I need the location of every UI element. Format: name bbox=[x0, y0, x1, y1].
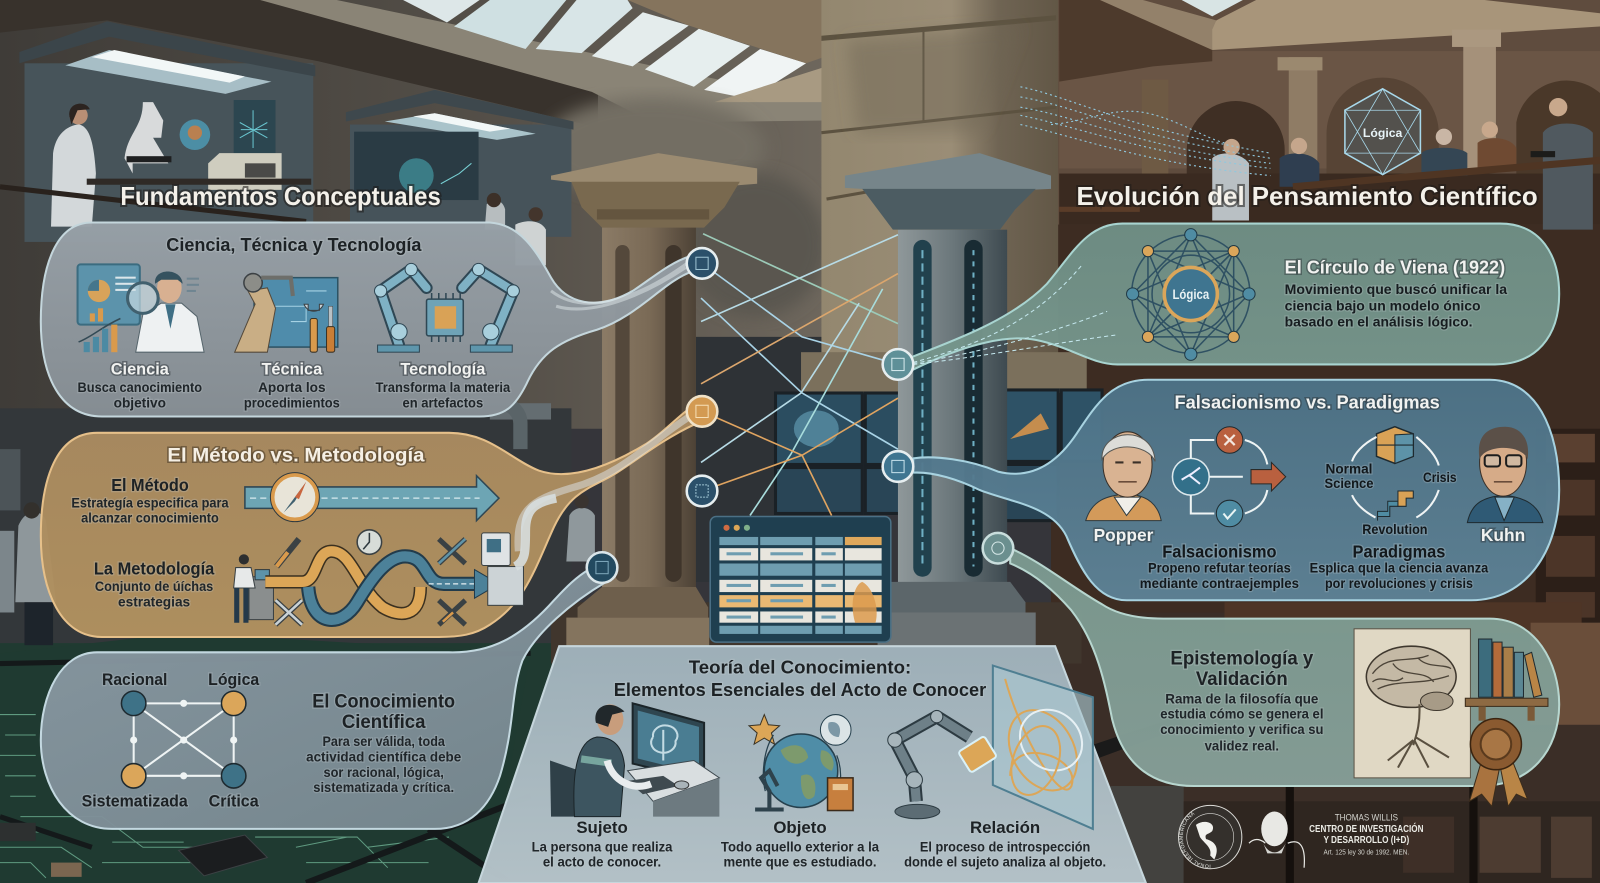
panel: Falsacionismo vs. Paradigmas bbox=[913, 380, 1559, 600]
portrait: Popper: Popper bbox=[1094, 525, 1154, 545]
connector lines bbox=[701, 234, 898, 516]
text: La Metodología: estrategias bbox=[118, 594, 191, 609]
glass case 2 bbox=[346, 90, 573, 265]
cycle: normal science, crisis, revolution: Normal bbox=[1326, 462, 1372, 477]
monitors wall bbox=[776, 390, 1102, 521]
credit text bbox=[1309, 813, 1423, 856]
text: Paradigmas bbox=[1310, 541, 1489, 591]
text: Paradigmas: Paradigmas bbox=[1353, 541, 1445, 561]
labels: Sujeto: La persona que realiza bbox=[532, 839, 673, 854]
labels: Técnica: Aporta los bbox=[258, 380, 326, 395]
bookshelves right bbox=[1061, 429, 1600, 883]
credit text: THOMAS WILLIS bbox=[1335, 813, 1398, 823]
text block: El Conocimiento Científica: actividad científica debe bbox=[306, 750, 462, 765]
heading: Falsacionismo vs. Paradigmas bbox=[1174, 391, 1440, 412]
text: Falsacionismo bbox=[1140, 541, 1299, 591]
icon: blueprint and tools bbox=[235, 274, 338, 352]
technicians in background bbox=[0, 403, 595, 645]
illustration: robot arm and holographic panel bbox=[888, 666, 1094, 829]
network diagram: Lógica: Lógica bbox=[1172, 287, 1209, 302]
text block: El Conocimiento Científica bbox=[306, 690, 462, 795]
main stone pillar bbox=[801, 0, 1087, 393]
cycle: normal science, crisis, revolution bbox=[1324, 427, 1457, 537]
railing bbox=[0, 187, 306, 222]
hall arcade bbox=[1059, 0, 1600, 225]
logo: Americas seal: ALIANZA INTERINSTITUCIONAL IBEROAMERICANA bbox=[1179, 812, 1210, 868]
illustration: brain parchment bbox=[1354, 629, 1470, 778]
icon: scientist with magnifier bbox=[78, 264, 204, 352]
portrait: Kuhn: Kuhn bbox=[1481, 525, 1525, 545]
text: El Método: alcanzar conocimiento bbox=[81, 511, 219, 526]
heading: Elementos Esenciales del Acto de Conocer bbox=[614, 680, 987, 701]
panel: El Conocimiento Científica bbox=[41, 570, 606, 829]
credit text: Art. 125 ley 30 de 1992. MEN. bbox=[1323, 848, 1409, 856]
diagram: four attributes bbox=[82, 671, 260, 810]
text block: El Conocimiento Científica: El Conocimiento bbox=[312, 690, 455, 712]
labels: Relación: donde el sujeto analiza al objeto. bbox=[904, 855, 1106, 870]
portrait: Popper bbox=[1086, 432, 1161, 545]
text block: El Conocimiento Científica: sistematizada y crítica. bbox=[313, 780, 454, 795]
illustration: subject at computer bbox=[550, 703, 719, 817]
text: El Círculo de Viena: basado en el análisis lógico. bbox=[1285, 315, 1472, 330]
labels: Ciencia: objetivo bbox=[114, 395, 166, 410]
text: El Círculo de Viena: ciencia bajo un modelo ónico bbox=[1285, 298, 1481, 313]
cycle: normal science, crisis, revolution: Revolution bbox=[1362, 522, 1428, 537]
text block: El Conocimiento Científica: Para ser válida, toda bbox=[322, 734, 445, 749]
labels: Tecnología bbox=[376, 361, 511, 410]
labels: Sujeto: Sujeto bbox=[576, 818, 628, 837]
node: Círculo de Viena bbox=[883, 349, 913, 380]
node: Conocimiento bbox=[587, 552, 617, 583]
title: Fundamentos Conceptuales: Fundamentos Conceptuales bbox=[120, 183, 441, 211]
diagram: four attributes: Lógica bbox=[208, 671, 260, 689]
heading: Teoría del Conocimiento: bbox=[689, 658, 911, 679]
illustration: books on shelf bbox=[1465, 639, 1548, 721]
text: La Metodología bbox=[94, 559, 215, 609]
diagram: four attributes: Racional bbox=[102, 671, 167, 689]
heading: El Método vs. Metodología bbox=[167, 444, 425, 466]
text: Paradigmas: Esplica que la ciencia avanza bbox=[1310, 561, 1489, 576]
text block: validez real. bbox=[1205, 738, 1279, 753]
title: Evolución del Pensamiento Científico: Evolución del Pensamiento Científico bbox=[1077, 183, 1538, 211]
left column bbox=[551, 153, 757, 646]
holographic Lógica sign: Lógica bbox=[1363, 126, 1403, 140]
portrait: Kuhn bbox=[1467, 427, 1543, 545]
cycle: normal science, crisis, revolution: Crisis bbox=[1423, 470, 1457, 485]
text: La Metodología: La Metodología bbox=[94, 559, 215, 579]
circuit board floor bbox=[0, 633, 531, 883]
panel: El Círculo de Viena bbox=[911, 224, 1559, 370]
text block: El Conocimiento Científica: sor racional, lógica, bbox=[323, 765, 444, 780]
process road diagram bbox=[234, 498, 556, 625]
labels: Relación: El proceso de introspección bbox=[920, 839, 1090, 854]
labels: Sujeto bbox=[532, 818, 673, 870]
logo: head silhouette bbox=[1249, 812, 1304, 868]
credit text: CENTRO DE INVESTIGACIÓN bbox=[1309, 823, 1423, 835]
labels: Tecnología: Tecnología bbox=[400, 361, 486, 379]
holographic Lógica sign bbox=[1345, 89, 1420, 175]
node: Método bbox=[687, 396, 717, 427]
text: Paradigmas: por revoluciones y crisis bbox=[1325, 576, 1473, 591]
dark ceiling and skylight bbox=[0, 0, 827, 128]
heading: Ciencia, Técnica y Tecnología bbox=[166, 234, 422, 255]
text: El Método: Estrategía especifica para bbox=[71, 495, 229, 510]
diagram: four attributes: Crítica bbox=[209, 792, 260, 810]
panel: Ciencia, Técnica y Tecnología bbox=[41, 223, 692, 416]
icon: robot arms assembling chip bbox=[374, 263, 519, 352]
node: Teoría bbox=[687, 476, 717, 506]
labels: Técnica: procedimientos bbox=[244, 395, 340, 410]
labels: Ciencia: Busca canocimiento bbox=[78, 380, 202, 395]
node: Ciencia bbox=[687, 248, 717, 279]
credit text: Y DESARROLLO (I+D) bbox=[1323, 835, 1409, 846]
data table bbox=[710, 517, 891, 642]
glass tube bbox=[518, 416, 690, 551]
labels: Sujeto: el acto de conocer. bbox=[543, 855, 661, 870]
text block: Rama de la filosofía que bbox=[1165, 691, 1319, 706]
right column bbox=[845, 153, 1051, 645]
arrow with compass bbox=[245, 473, 499, 522]
labels: Tecnología: en artefactos bbox=[403, 395, 484, 410]
text block: Validación bbox=[1196, 668, 1288, 690]
scholars on balcony bbox=[1059, 98, 1600, 230]
labels: Relación bbox=[904, 818, 1106, 870]
text: El Método: El Método bbox=[111, 475, 189, 495]
labels: Objeto: Todo aquello exterior a la bbox=[721, 839, 879, 854]
panel: El Método vs. Metodología bbox=[41, 408, 694, 637]
text block bbox=[1160, 648, 1323, 753]
labels: Objeto: Objeto bbox=[773, 818, 827, 837]
text block: Epistemología y bbox=[1170, 648, 1313, 670]
text: Falsacionismo: Propeno refutar teorías bbox=[1148, 561, 1291, 576]
text block: conocimiento y verifica su bbox=[1160, 722, 1323, 737]
flow: falsification bbox=[1172, 427, 1286, 527]
icon: wax seal bbox=[1469, 719, 1528, 806]
text: Falsacionismo: Falsacionismo bbox=[1162, 541, 1277, 561]
node: Epistemología bbox=[983, 533, 1013, 563]
text: El Círculo de Viena: Movimiento que buscó unificar la bbox=[1285, 282, 1508, 297]
data stream bbox=[1020, 87, 1270, 176]
panel: Teoría del Conocimiento bbox=[479, 646, 1146, 883]
cycle: normal science, crisis, revolution: Science bbox=[1324, 476, 1374, 491]
text: La Metodología: Conjunto de úíchas bbox=[95, 579, 214, 594]
labels: Ciencia: Ciencia bbox=[111, 361, 170, 379]
labels: Relación: Relación bbox=[970, 818, 1040, 837]
text: El Círculo de Viena bbox=[1285, 257, 1508, 330]
labels: Ciencia bbox=[78, 361, 202, 410]
heading bbox=[614, 658, 987, 701]
labels: Objeto bbox=[721, 818, 879, 870]
diagram: four attributes: Sistematizada bbox=[82, 792, 189, 810]
glass case 1 bbox=[19, 21, 315, 242]
labels: Técnica bbox=[244, 361, 340, 410]
light streams bbox=[913, 265, 1117, 364]
labels: Técnica: Técnica bbox=[261, 361, 323, 379]
text: El Círculo de Viena: El Círculo de Viena (1922) bbox=[1285, 257, 1505, 278]
labels: Objeto: mente que es estudiado. bbox=[723, 855, 877, 870]
labels: Tecnología: Transforma la materia bbox=[376, 380, 511, 395]
node: Falsacionismo bbox=[883, 451, 913, 482]
text block: El Conocimiento Científica: Científica bbox=[342, 711, 426, 733]
panel: Epistemología y Validación bbox=[1010, 548, 1559, 806]
text: El Método bbox=[71, 475, 229, 526]
text: Falsacionismo: mediante contraejemples bbox=[1140, 576, 1299, 591]
logo: Americas seal bbox=[1178, 804, 1242, 870]
illustration: globe and objects bbox=[749, 715, 853, 811]
network diagram: Lógica bbox=[1127, 229, 1255, 360]
text block: estudia cómo se genera el bbox=[1160, 707, 1323, 722]
